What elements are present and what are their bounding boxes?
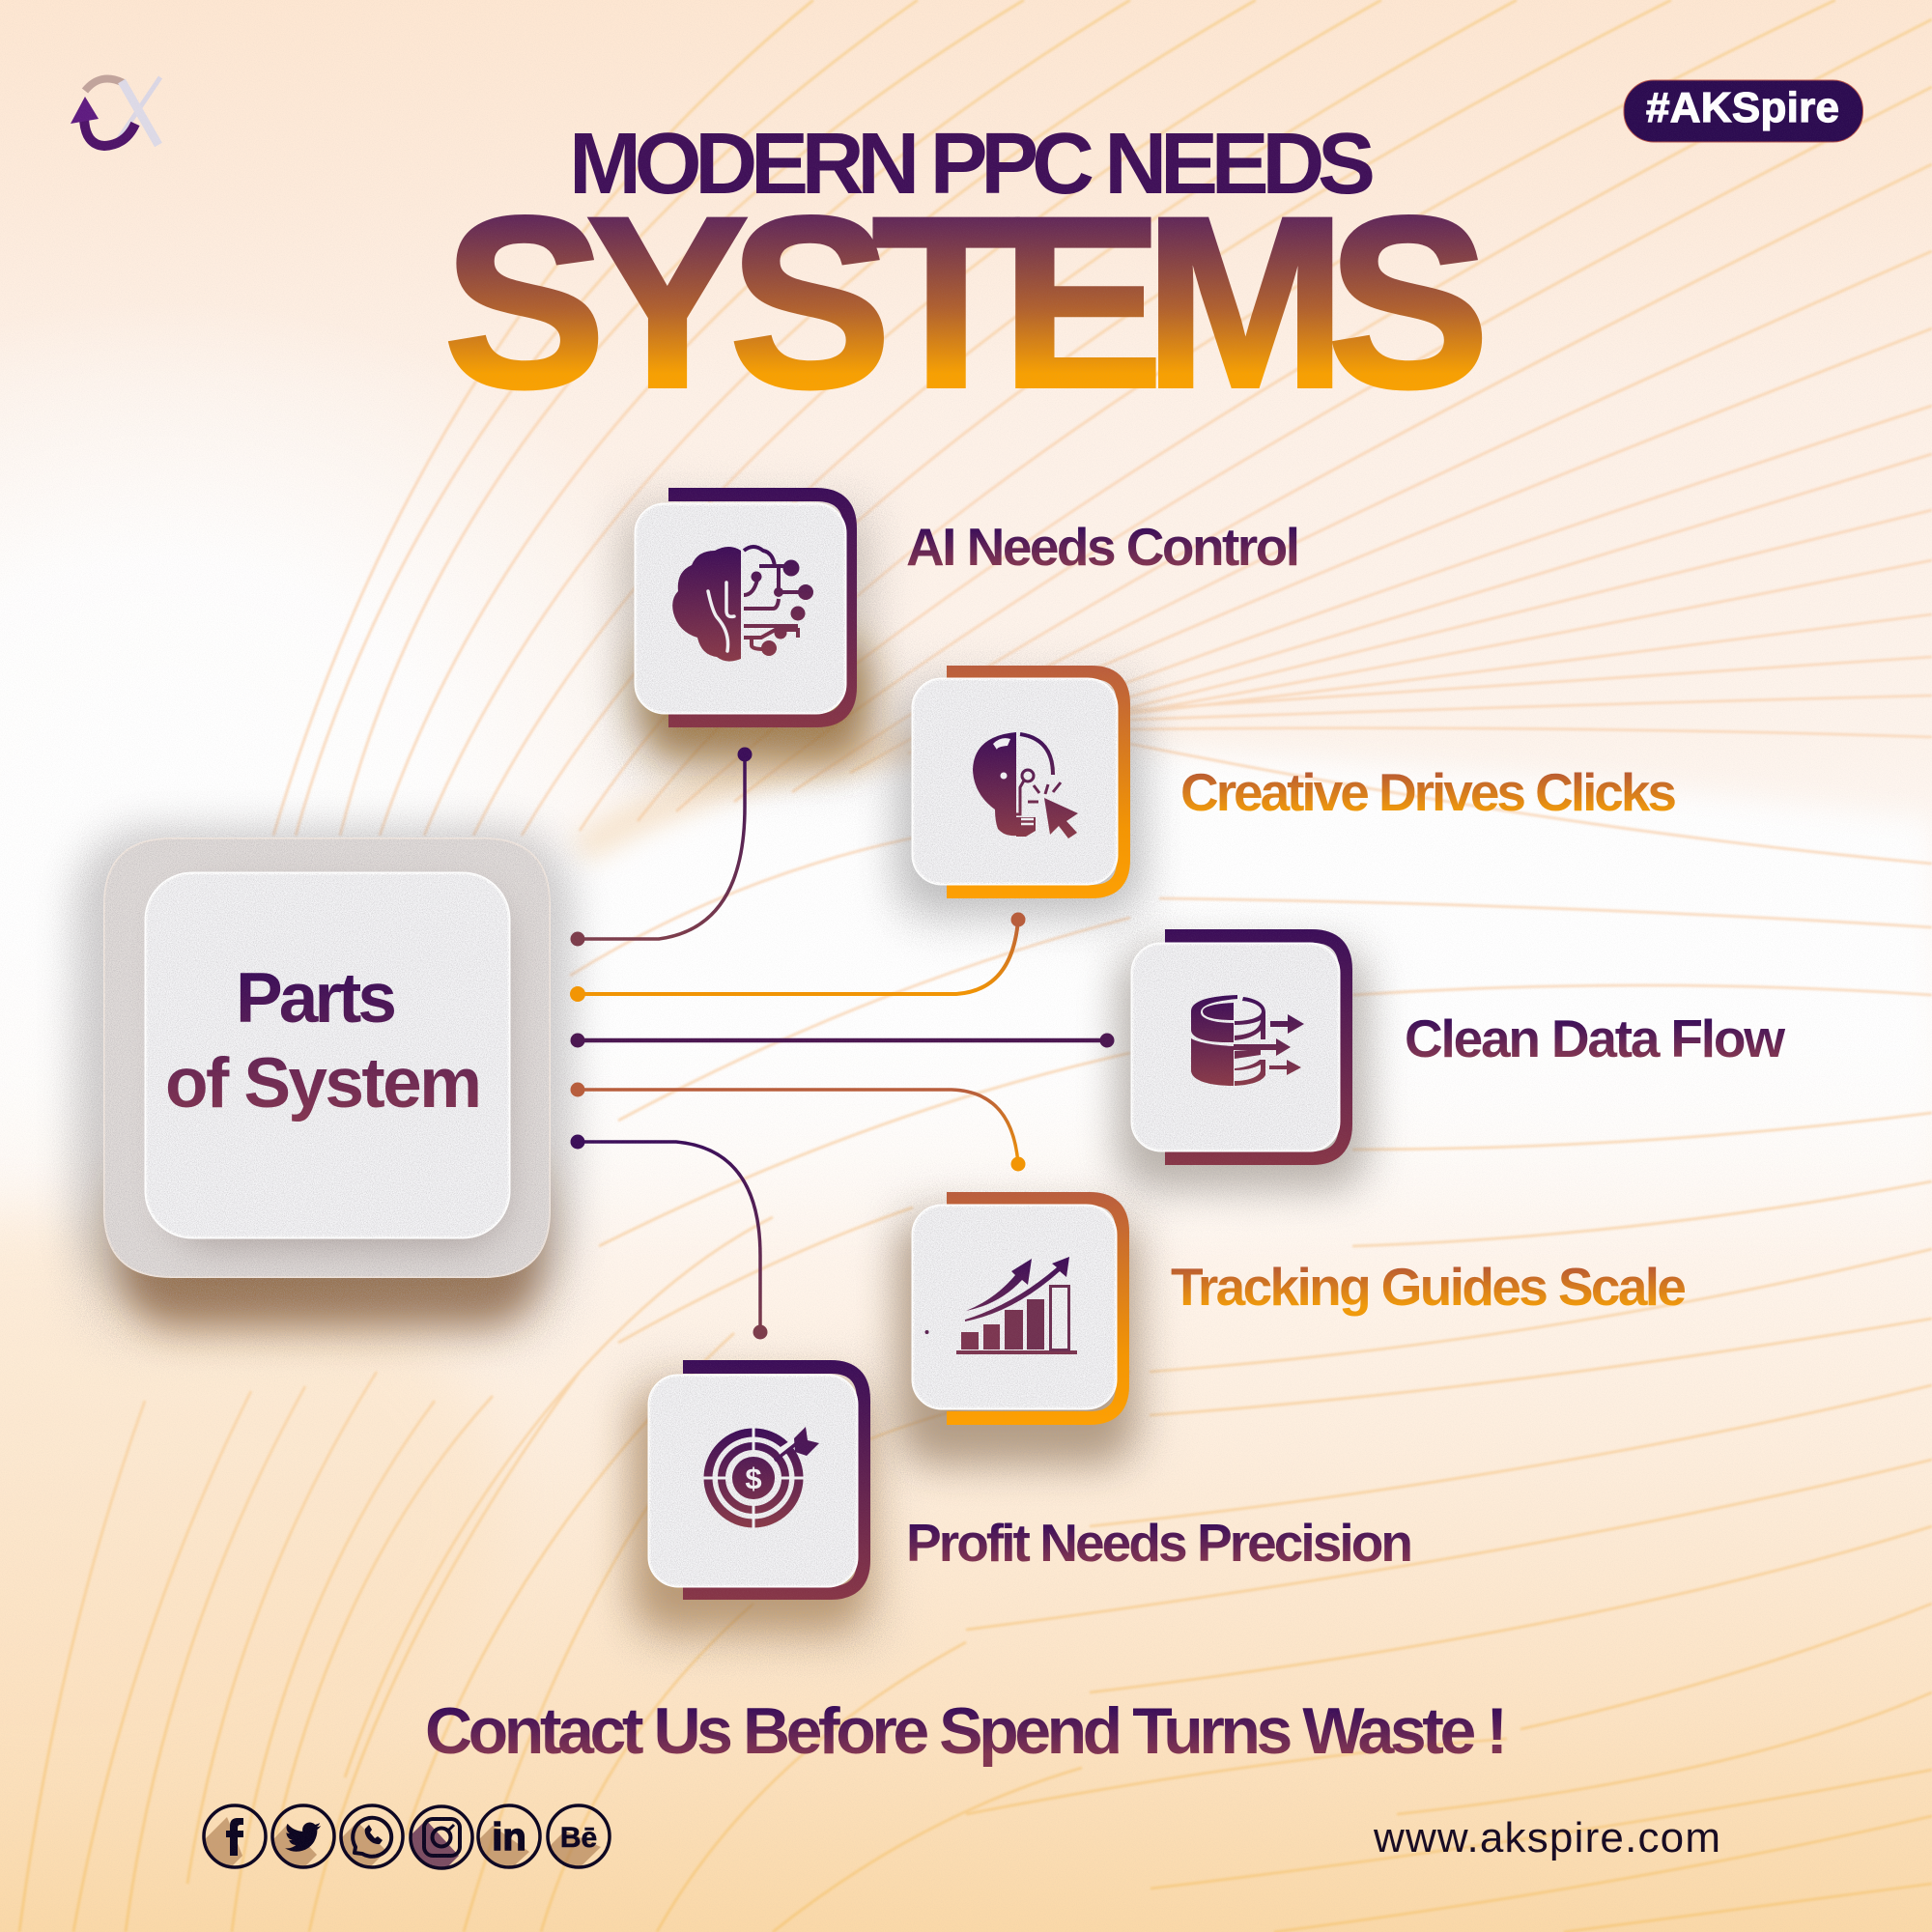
connector: AI [570,748,752,947]
logo [71,77,160,146]
label: creative drives clicks: Creative Drives Clicks [1180,762,1677,822]
icon: linkedin: in [492,1816,526,1859]
icon: instagram [391,1806,472,1889]
icon: database with arrows [1191,995,1304,1086]
connector: profit [570,1134,767,1339]
connector: data [570,1034,1115,1047]
icon: dollar target with dart: $ [745,1462,762,1495]
website: www.akspire.com [1373,1814,1720,1861]
title [443,116,1490,439]
central panel: parts of system [104,838,550,1277]
icon: behance: Bē [560,1822,597,1854]
label: clean data flow: Clean Data Flow [1405,1009,1785,1068]
hashtag badge [1624,80,1862,142]
call to action: Contact Us Before Spend Turns Waste ! [425,1694,1508,1768]
card: tracking guides scale [913,1199,1122,1418]
label: profit needs precision: Profit Needs Precision [906,1513,1413,1573]
icon: bulb head with cursor [973,732,1078,838]
card: creative drives clicks [913,672,1123,892]
icon: brain [672,547,813,662]
card: clean data flow [1132,936,1346,1158]
panel label: Parts [236,959,397,1037]
icon: facebook [188,1805,266,1894]
heading line one: MODERN PPC NEEDS [569,116,1376,213]
card shadows [48,469,1399,1676]
heading line two: SYSTEMS [443,167,1490,439]
label: AI needs control: AI Needs Control [906,517,1300,577]
icon: growth chart [925,1257,1077,1354]
icon: twitter [261,1805,334,1882]
connector lines [570,748,1115,1339]
hashtag badge: #AKSpire [1646,84,1839,131]
panel label line two: of System [165,1044,482,1122]
label: tracking guides scale: Tracking Guides Scale [1171,1257,1687,1317]
icon: behance [536,1805,610,1882]
connector: creative [570,912,1026,1002]
connector: tracking [570,1082,1026,1171]
social icons [188,1805,610,1894]
card: profit needs precision [649,1367,864,1593]
icon: whatsapp [328,1805,403,1880]
icon: linkedin [464,1805,540,1884]
card: AI needs control [636,495,850,721]
icon: dollar target with dart [703,1427,819,1530]
